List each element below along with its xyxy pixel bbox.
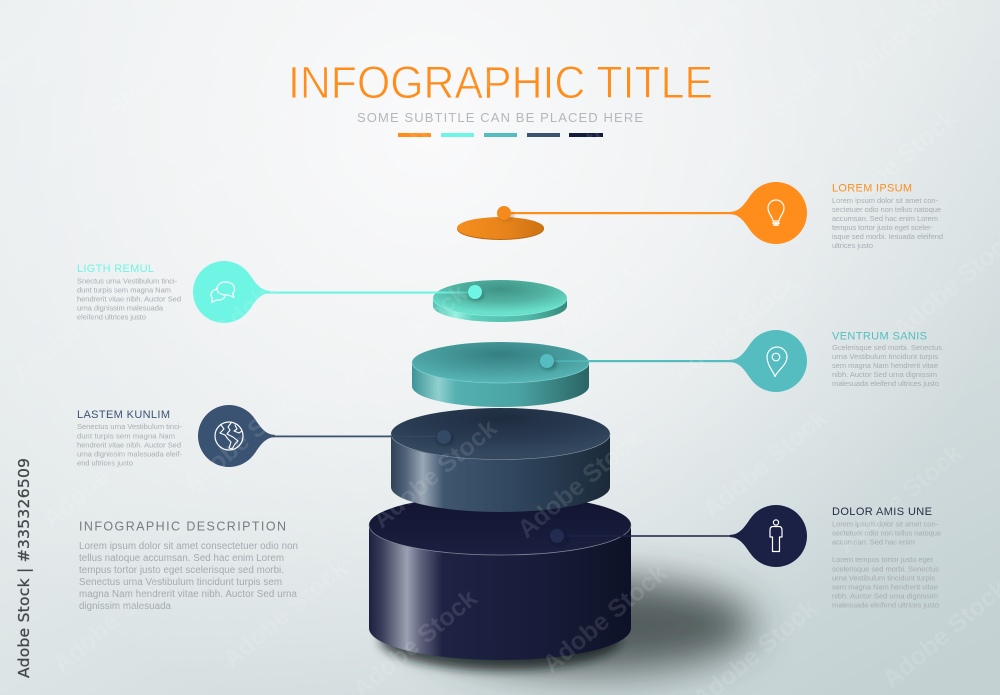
text block: ventrum sanis	[832, 330, 942, 388]
text block: infographic description: INFOGRAPHIC DESCRIPTION	[79, 520, 286, 534]
stack layer 3: connector and dot	[540, 354, 746, 370]
stock watermark tiles: Adobe Stock	[47, 559, 182, 679]
balloon: dolor amis une, person	[730, 505, 807, 567]
text block: infographic description	[79, 520, 298, 612]
text block: ligth remul: hendrerit vitae nibh. Auctor Sed	[77, 294, 181, 304]
stock watermark tiles: Adobe Stock	[165, 99, 300, 219]
stock watermark tiles: Adobe Stock	[832, 439, 967, 559]
balloon: ventrum sanis, map pin	[730, 330, 807, 392]
text block: lastem kunlim: end ultrices justo	[77, 458, 133, 468]
stack layer 3: teal cylinder	[412, 342, 589, 407]
text block: ventrum sanis: urna Vestibulum tincidunt turpis	[832, 352, 938, 361]
stock watermark tiles: Adobe Stock	[37, 414, 172, 534]
icon: speech bubbles	[211, 282, 234, 302]
text block: infographic description: tempus tortor justo eget scelerisque sed morbi.	[79, 565, 284, 576]
text block: ligth remul: eleifend ultrices justo	[77, 312, 146, 322]
colour key bars	[398, 133, 603, 137]
stock watermark tiles: Adobe Stock	[667, 269, 802, 389]
text block: dolor amis une: nibh. Auctor Sed urna dignissim	[832, 592, 938, 600]
text block: lastem kunlim: dunt turpis sem magna Nam	[77, 432, 175, 440]
text block: ligth remul: dunt turpis sem magna Nam	[77, 286, 171, 294]
balloon: lastem kunlim, globe	[198, 405, 275, 467]
text block: lorem ipsum: LOREM IPSUM	[832, 182, 912, 194]
stock watermark tiles: Adobe Stock	[827, 104, 962, 224]
text block: ventrum sanis: malesuada eleifend ultrices justo	[832, 379, 939, 388]
stack layer 2: connector and dot	[262, 285, 484, 301]
stock watermark tiles: Adobe Stock	[502, 99, 637, 219]
stock watermark tiles: Adobe Stock	[697, 59, 832, 179]
text block: infographic description: magna Nam hendrerit vitae nibh. Auctor Sed urna	[79, 589, 298, 600]
text block: infographic description: Lorem ipsum dolor sit amet consectetuer odio non	[79, 541, 298, 552]
text block: infographic description: dignissim malesuada	[79, 601, 172, 612]
stock watermark tiles: Adobe Stock	[552, 224, 687, 344]
text block: dolor amis une: DOLOR AMIS UNE	[832, 506, 932, 518]
icon: person	[770, 520, 782, 552]
text block: dolor amis une: sectetuer odio non tellus natoque	[832, 528, 941, 538]
balloon: lorem ipsum, lightbulb	[730, 182, 807, 244]
text block: dolor amis une: Lorem tempus tortor justo eget	[832, 555, 934, 564]
balloon: ligth remul, speech bubbles	[193, 261, 270, 323]
stock watermark tiles: Adobe Stock	[177, 379, 312, 499]
title: INFOGRAPHIC TITLE	[288, 57, 713, 108]
stack layer 5: dark base cylinder	[369, 495, 631, 660]
text block: dolor amis une	[832, 506, 941, 610]
stack layer 1: connector and dot	[497, 206, 746, 221]
stock watermark tiles: Adobe Stock	[337, 279, 472, 399]
stock watermark tiles: Adobe Stock	[209, 224, 344, 344]
text block: lastem kunlim: urna dignissim malesuada eleif-	[77, 450, 182, 458]
text block: lastem kunlim: Senectus urna Vestibulum tinci-	[77, 422, 182, 431]
stack layer 1: orange disc	[457, 217, 544, 240]
text block: ventrum sanis: sem magna Nam hendrerit vitae	[832, 361, 938, 370]
stack layer 4: navy cylinder	[391, 408, 610, 512]
stock watermark tiles: Adobe Stock	[537, 559, 672, 679]
text block: ligth remul	[77, 263, 181, 322]
text block: ventrum sanis: VENTRUM SANIS	[832, 330, 927, 342]
stock watermark tiles: Adobe Stock	[367, 414, 502, 534]
stock watermark tiles: Adobe Stock	[697, 404, 832, 524]
text block: ventrum sanis: Gcelerisque sed morbi. Senectus	[832, 343, 942, 352]
stock watermark tiles: Adobe Stock	[7, 269, 142, 389]
text block: ligth remul: Snectus urna Vestibulum tinci-	[77, 276, 178, 286]
text block: lorem ipsum: isque sed morbi. Iesuada eleifend	[832, 232, 943, 241]
text block: infographic description: tellus natoque accumsan. Sed hac enim Lorem	[79, 553, 284, 564]
text block: infographic description: Senectus urna Vestibulum tincidunt turpis sem	[79, 577, 282, 588]
text block: lorem ipsum: sectetuer odio non tellus natoque	[832, 205, 941, 214]
text block: dolor amis une: urna Vestibulum tincidunt turpis	[832, 574, 935, 582]
text block: dolor amis une: scelerisque sed morbi. Senectus	[832, 564, 939, 574]
stack layer 4: connector and dot	[262, 430, 453, 445]
text block: dolor amis une: Lorem ipsum dolor sit amet con-	[832, 520, 938, 528]
text block: lorem ipsum: accumsan. Sed hac enim Lorem	[832, 214, 938, 223]
stock watermark tiles: Adobe Stock	[217, 554, 352, 674]
text block: lastem kunlim	[77, 409, 182, 468]
text block: lorem ipsum: ultrices justo	[832, 241, 873, 250]
text block: dolor amis une: sem magna Nam hendrerit vitae	[832, 582, 938, 592]
icon: globe	[215, 422, 243, 450]
text block: lastem kunlim: LASTEM KUNLIM	[77, 409, 170, 421]
icon: lightbulb	[768, 200, 784, 225]
text block: lorem ipsum: Lorem ipsum dolor sit amet con-	[832, 196, 938, 205]
text block: ligth remul: LIGTH REMUL	[77, 263, 154, 275]
text block: dolor amis une: accumsan. Sed hac enim	[832, 538, 915, 546]
stock watermark tiles: Adobe Stock	[367, 64, 502, 184]
stock watermark tiles: Adobe Stock	[37, 59, 172, 179]
stack layer 2: light teal disc	[433, 280, 567, 322]
icon: map pin	[767, 347, 787, 376]
text block: lorem ipsum: tempus tortor justo eget sceler-	[832, 223, 934, 232]
subtitle: SOME SUBTITLE CAN BE PLACED HERE	[357, 110, 643, 125]
text block: lastem kunlim: hendrerit vitae nibh. Auctor Sed	[77, 440, 181, 450]
text block: ligth remul: urna dignissim malesuada	[77, 304, 164, 312]
cylinder shadow	[380, 577, 755, 673]
stock id side label: Adobe Stock | #335326509	[15, 458, 33, 678]
text block: dolor amis une: malesuada eleifend ultrices justo	[832, 600, 939, 610]
text block: ventrum sanis: nibh. Auctor Sed urna dignissim	[832, 370, 937, 379]
stock watermark tiles: Adobe Stock	[512, 424, 647, 544]
text block: lorem ipsum	[832, 182, 943, 250]
stack layer 5: connector and dot	[550, 529, 745, 545]
